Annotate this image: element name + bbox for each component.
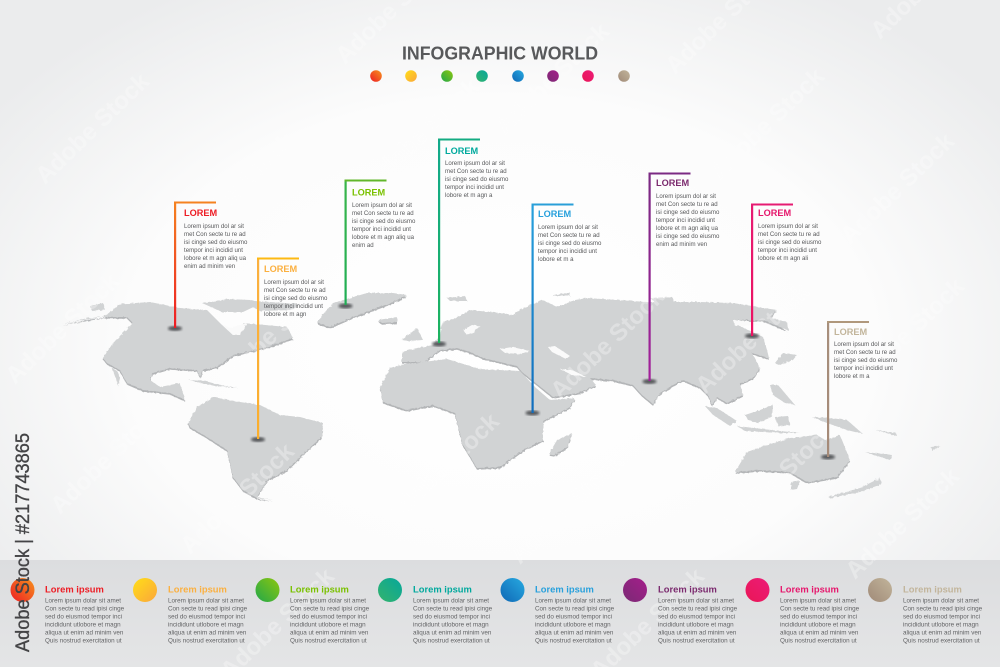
- flag pin: teal, Europe: isi cinge sed do eiusmo: [445, 176, 509, 183]
- flag pin: pink, East Asia: met Con secte tu re ad: [758, 231, 820, 238]
- flag pin: purple, India: Lorem ipsum dol ar sit: [656, 193, 716, 200]
- world map: [62, 292, 940, 502]
- flag pin: blue, East Africa: Lorem ipsum dol ar sit: [538, 224, 598, 231]
- Eurasia: [402, 298, 787, 405]
- flag pin: blue, East Africa: [526, 204, 602, 416]
- flag pin: red, North America: enim ad minim ven: [184, 263, 235, 270]
- flag pin: yellow, South America: lobore et m agn: [264, 311, 306, 318]
- legend item 4: teal: sed do eiusmod tempor inci: [413, 614, 490, 620]
- flag pin: green, Greenland: tempor inci incidid unt: [352, 226, 411, 233]
- flag pin: purple, India: tempor inci incidid unt: [656, 217, 715, 224]
- flag pin: pink, East Asia: Lorem ipsum dol ar sit: [758, 223, 818, 230]
- flag pin: teal, Europe: lobore et m agn a: [445, 192, 493, 199]
- flag pin: green, Greenland: LOREM: [352, 188, 386, 198]
- flag pin: green, Greenland: isi cinge sed do eiusmo: [352, 218, 416, 225]
- legend item 6: purple: aliqua ut enim ad minim ven: [658, 630, 737, 636]
- legend item 3: green: Con secte tu read ipisi cinge: [290, 606, 370, 612]
- legend item 2: yellow: Lorem ipsum: [168, 584, 227, 594]
- legend item 1: red: Lorem ipsum: [45, 584, 104, 594]
- flag pin: tan, Australia: lobore et m a: [834, 373, 870, 380]
- watermark: Adobe Stock: [210, 273, 335, 394]
- legend item 5: blue: Lorem ipsum dolar sit amet: [535, 598, 611, 604]
- flag pin: purple, India: isi cinge sed do eiusmo: [656, 233, 720, 240]
- legend item 4: teal: Con secte tu read ipisi cinge: [413, 606, 493, 612]
- colour dots row: [370, 70, 630, 82]
- flag pin: pink, East Asia: LOREM: [758, 208, 792, 218]
- flag pin: teal, Europe: [432, 138, 509, 346]
- watermark: Adobe Stock: [845, 273, 970, 394]
- flag pin: green, Greenland: enim ad: [352, 242, 374, 249]
- flag pin: red, North America: met Con secte tu re ad: [184, 231, 246, 238]
- legend item 3: green: sed do eiusmod tempor inci: [290, 614, 367, 620]
- flag pin: blue, East Africa: lobore et m a: [538, 256, 574, 263]
- watermark: Adobe Stock: [690, 278, 815, 399]
- flag pin: tan, Australia: tempor inci incidid unt: [834, 365, 893, 372]
- legend item 7: pink: sed do eiusmod tempor inci: [780, 614, 857, 620]
- flag pin: blue, East Africa: tempor inci incidid unt: [538, 248, 597, 255]
- watermark: Adobe Stock: [380, 408, 505, 529]
- flag pin: teal, Europe: LOREM: [445, 146, 479, 156]
- watermark: Adobe Stock: [0, 268, 125, 389]
- islands: [90, 292, 940, 498]
- flag pin: purple, India: met Con secte tu re ad: [656, 201, 718, 208]
- flag pin: blue, East Africa: LOREM: [538, 209, 572, 219]
- flag pin: green, Greenland: met Con secte tu re ad: [352, 210, 414, 217]
- map extrusion shadow: [62, 295, 850, 502]
- Greenland: [318, 293, 407, 327]
- watermark: Adobe Stock: [360, 73, 485, 194]
- legend item 8: tan: sed do eiusmod tempor inci: [903, 614, 980, 620]
- legend item 4: teal: Lorem ipsum dolar sit amet: [413, 598, 489, 604]
- flag pin: teal, Europe: met Con secte tu re ad: [445, 168, 507, 175]
- flag pin: green, Greenland: lobore et m agn aliq ua: [352, 234, 415, 241]
- watermark: Adobe Stock: [505, 448, 630, 569]
- legend item 8: tan: [868, 578, 983, 644]
- bottom legend band: [0, 560, 1000, 667]
- legend item 5: blue: incididunt utlobore et magn: [535, 622, 611, 628]
- watermark: Adobe Stock: [835, 128, 960, 249]
- flag pin: yellow, South America: Lorem ipsum dol ar sit: [264, 279, 324, 286]
- North America: [62, 302, 293, 400]
- legend item 5: blue: [500, 578, 615, 644]
- watermark: Adobe Stock: [175, 128, 300, 249]
- legend item 2: yellow: sed do eiusmod tempor inci: [168, 614, 245, 620]
- flag pin: pink, East Asia: isi cinge sed do eiusmo: [758, 239, 822, 246]
- flag pin: red, North America: LOREM: [184, 208, 218, 218]
- watermark: Adobe Stock: [490, 18, 615, 139]
- watermark: Adobe Stock: [715, 418, 840, 539]
- legend item 1: red: Lorem ipsum dolar sit amet: [45, 598, 121, 604]
- flag pin: purple, India: enim ad minim ven: [656, 241, 707, 248]
- legend item 2: yellow: aliqua ut enim ad minim ven: [168, 630, 247, 636]
- flag pin: blue, East Africa: isi cinge sed do eiusmo: [538, 240, 602, 247]
- legend item 1: red: aliqua ut enim ad minim ven: [45, 630, 124, 636]
- flag pin: red, North America: Lorem ipsum dol ar sit: [184, 223, 244, 230]
- Africa: [380, 359, 575, 468]
- legend item 4: teal: aliqua ut enim ad minim ven: [413, 630, 492, 636]
- legend item 7: pink: aliqua ut enim ad minim ven: [780, 630, 859, 636]
- legend item 6: purple: Con secte tu read ipisi cinge: [658, 606, 738, 612]
- flag pin: purple, India: LOREM: [656, 178, 690, 188]
- flag pin: red, North America: tempor inci incidid unt: [184, 247, 243, 254]
- legend item 3: green: incididunt utlobore et magn: [290, 622, 366, 628]
- legend item 2: yellow: Con secte tu read ipisi cinge: [168, 606, 248, 612]
- legend item 3: green: Quis nostrud exercitation ut: [290, 638, 367, 644]
- watermark: Adobe Stock: [30, 68, 155, 189]
- legend item 3: green: aliqua ut enim ad minim ven: [290, 630, 369, 636]
- flag pin: yellow, South America: tempor inci incidid unt: [264, 303, 323, 310]
- inland seas and bays: [220, 320, 760, 377]
- vertical stock id text: Adobe Stock | #217743865: [12, 433, 34, 652]
- legend item 7: pink: incididunt utlobore et magn: [780, 622, 856, 628]
- flag pin: yellow, South America: [251, 258, 328, 442]
- Iceland: [378, 317, 397, 323]
- South America: [188, 397, 323, 500]
- continents: [62, 292, 940, 500]
- legend item 4: teal: Lorem ipsum: [413, 584, 472, 594]
- flag pin: pink, East Asia: [745, 204, 822, 338]
- legend item 6: purple: Lorem ipsum: [658, 584, 717, 594]
- legend item 2: yellow: Lorem ipsum dolar sit amet: [168, 598, 244, 604]
- legend item 6: purple: Quis nostrud exercitation ut: [658, 638, 735, 644]
- legend item 6: purple: Lorem ipsum dolar sit amet: [658, 598, 734, 604]
- legend item 7: pink: [746, 578, 860, 644]
- flag pin: pink, East Asia: lobore et m agn ali: [758, 255, 808, 262]
- legend item 6: purple: sed do eiusmod tempor inci: [658, 614, 735, 620]
- legend item 3: green: Lorem ipsum: [290, 584, 349, 594]
- legend item 7: pink: Quis nostrud exercitation ut: [780, 638, 857, 644]
- flag pin: tan, Australia: [821, 321, 898, 460]
- flag pin: tan, Australia: isi cinge sed do eiusmo: [834, 357, 898, 364]
- flag pin: tan, Australia: met Con secte tu re ad: [834, 349, 896, 356]
- flag pin: green, Greenland: Lorem ipsum dol ar sit: [352, 202, 412, 209]
- Australia: [735, 435, 850, 482]
- flag pin: tan, Australia: Lorem ipsum dol ar sit: [834, 341, 894, 348]
- legend item 1: red: sed do eiusmod tempor inci: [45, 614, 122, 620]
- legend item 4: teal: incididunt utlobore et magn: [413, 622, 489, 628]
- flag pin: pink, East Asia: tempor inci incidid unt: [758, 247, 817, 254]
- legend item 7: pink: Lorem ipsum dolar sit amet: [780, 598, 856, 604]
- flag pin: green, Greenland: [338, 180, 416, 308]
- legend item 8: tan: incididunt utlobore et magn: [903, 622, 979, 628]
- legend item 2: yellow: incididunt utlobore et magn: [168, 622, 244, 628]
- legend item 6: purple: [623, 578, 738, 644]
- watermark: Adobe Stock: [705, 63, 830, 184]
- legend item 2: yellow: [133, 578, 248, 644]
- flag pin: red, North America: [168, 202, 248, 331]
- flag pin: yellow, South America: met Con secte tu re ad: [264, 287, 326, 294]
- legend item 5: blue: Con secte tu read ipisi cinge: [535, 606, 615, 612]
- legend item 8: tan: Lorem ipsum: [903, 584, 962, 594]
- legend item 5: blue: aliqua ut enim ad minim ven: [535, 630, 614, 636]
- legend item 1: red: incididunt utlobore et magn: [45, 622, 121, 628]
- flag pin: tan, Australia: LOREM: [834, 327, 868, 337]
- watermark: Adobe Stock: [840, 463, 965, 584]
- Madagascar: [549, 433, 572, 455]
- legend item 8: tan: Quis nostrud exercitation ut: [903, 638, 980, 644]
- watermark: Adobe Stock: [175, 438, 300, 559]
- title: INFOGRAPHIC WORLD: [402, 42, 598, 64]
- flag pin: purple, India: isi cinge sed do eiusmo: [656, 209, 720, 216]
- legend item 6: purple: incididunt utlobore et magn: [658, 622, 734, 628]
- legend item 1: red: Quis nostrud exercitation ut: [45, 638, 122, 644]
- legend item 5: blue: sed do eiusmod tempor inci: [535, 614, 612, 620]
- flag pin: red, North America: isi cinge sed do eiusmo: [184, 239, 248, 246]
- legend item 7: pink: Lorem ipsum: [780, 584, 839, 594]
- flag pin: blue, East Africa: met Con secte tu re ad: [538, 232, 600, 239]
- legend item 4: teal: [378, 578, 493, 644]
- flag pin: purple, India: lobore et m agn aliq ua: [656, 225, 719, 232]
- legend item 4: teal: Quis nostrud exercitation ut: [413, 638, 490, 644]
- legend item 3: green: [256, 578, 370, 644]
- flag pin: red, North America: lobore et m agn aliq ua: [184, 255, 247, 262]
- legend item 7: pink: Con secte tu read ipisi cinge: [780, 606, 860, 612]
- flag pin: yellow, South America: isi cinge sed do eiusmo: [264, 295, 328, 302]
- watermark: Adobe Stock: [545, 283, 670, 404]
- watermark: Adobe Stock: [45, 398, 170, 519]
- flag pin: teal, Europe: tempor inci incidid unt: [445, 184, 504, 191]
- flag pin: purple, India: [642, 172, 720, 384]
- legend item 1: red: Con secte tu read ipisi cinge: [45, 606, 125, 612]
- legend item 8: tan: Lorem ipsum dolar sit amet: [903, 598, 979, 604]
- legend item 3: green: Lorem ipsum dolar sit amet: [290, 598, 366, 604]
- legend item 2: yellow: Quis nostrud exercitation ut: [168, 638, 245, 644]
- legend item 8: tan: aliqua ut enim ad minim ven: [903, 630, 982, 636]
- flag pin: teal, Europe: Lorem ipsum dol ar sit: [445, 160, 505, 167]
- legend item 1: red: [10, 578, 125, 644]
- legend item 8: tan: Con secte tu read ipisi cinge: [903, 606, 983, 612]
- flag pin: yellow, South America: LOREM: [264, 264, 298, 274]
- legend item 5: blue: Lorem ipsum: [535, 584, 594, 594]
- legend item 5: blue: Quis nostrud exercitation ut: [535, 638, 612, 644]
